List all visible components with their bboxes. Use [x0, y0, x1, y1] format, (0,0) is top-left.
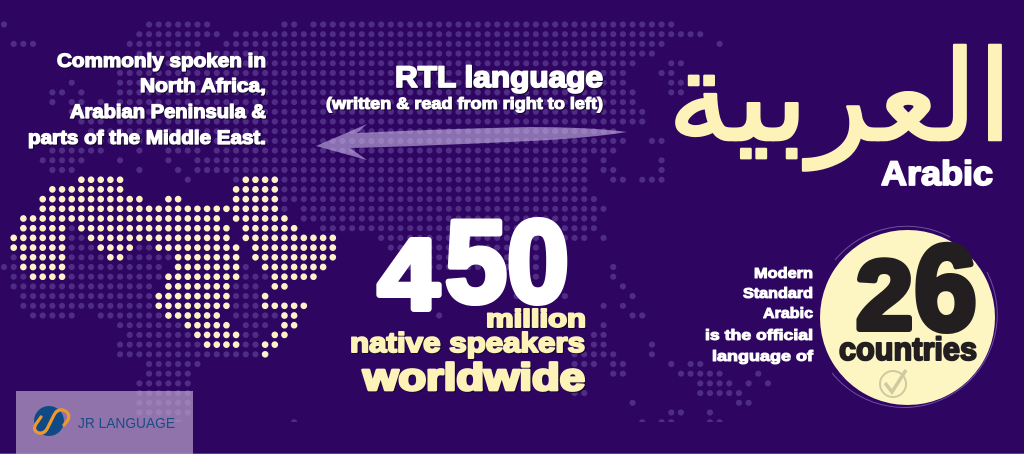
text: million native speakers worldwide: worldwide: [362, 357, 585, 399]
icon: check mark: [880, 370, 906, 397]
text: Modern Standard Arabic official language: language of: [712, 348, 814, 365]
badge: 26 countries: [820, 220, 997, 407]
text: where Arabic is spoken: Commonly spoken in: [57, 51, 266, 72]
text: where Arabic is spoken: [28, 51, 266, 149]
text: Modern Standard Arabic official language: Arabic: [763, 305, 813, 322]
text: million native speakers worldwide: [350, 305, 586, 399]
badge: 26 countries: 6: [914, 220, 977, 356]
text: Modern Standard Arabic official language: Standard: [743, 285, 813, 302]
text: Modern Standard Arabic official language: [705, 265, 814, 365]
text: where Arabic is spoken: parts of the Middle East.: [28, 128, 266, 149]
text: where Arabic is spoken: Arabian Peninsula &: [70, 102, 266, 123]
badge: 26 countries: countries: [839, 331, 977, 367]
text: Modern Standard Arabic official language: Modern: [754, 265, 813, 282]
logo panel: JR Language: JR LANGUAGE: [78, 415, 175, 432]
text: where Arabic is spoken: North Africa,: [140, 76, 266, 97]
text: Modern Standard Arabic official language: is the official: [705, 327, 813, 344]
label: Arabic: Arabic: [881, 155, 993, 193]
text: million native speakers worldwide: native speakers: [350, 327, 585, 358]
badge: 26 countries: 2: [856, 240, 913, 350]
big number: 450: 4: [378, 219, 439, 331]
logo panel: JR Language: [16, 391, 193, 454]
big number: 450: [378, 196, 569, 331]
big number: 450: 50: [445, 196, 569, 327]
arrow: right to left: [316, 124, 627, 160]
dotted world map background: [4, 24, 769, 422]
highlighted Arab world dot map: [14, 180, 334, 354]
heading: RTL language: RTL language: [395, 61, 603, 94]
text: million native speakers worldwide: million: [486, 305, 586, 333]
heading: RTL language: [326, 61, 603, 113]
Arabic word in Arabic script: العربية: [668, 25, 1012, 171]
heading: RTL language: (written & read from right to left): [326, 95, 603, 113]
